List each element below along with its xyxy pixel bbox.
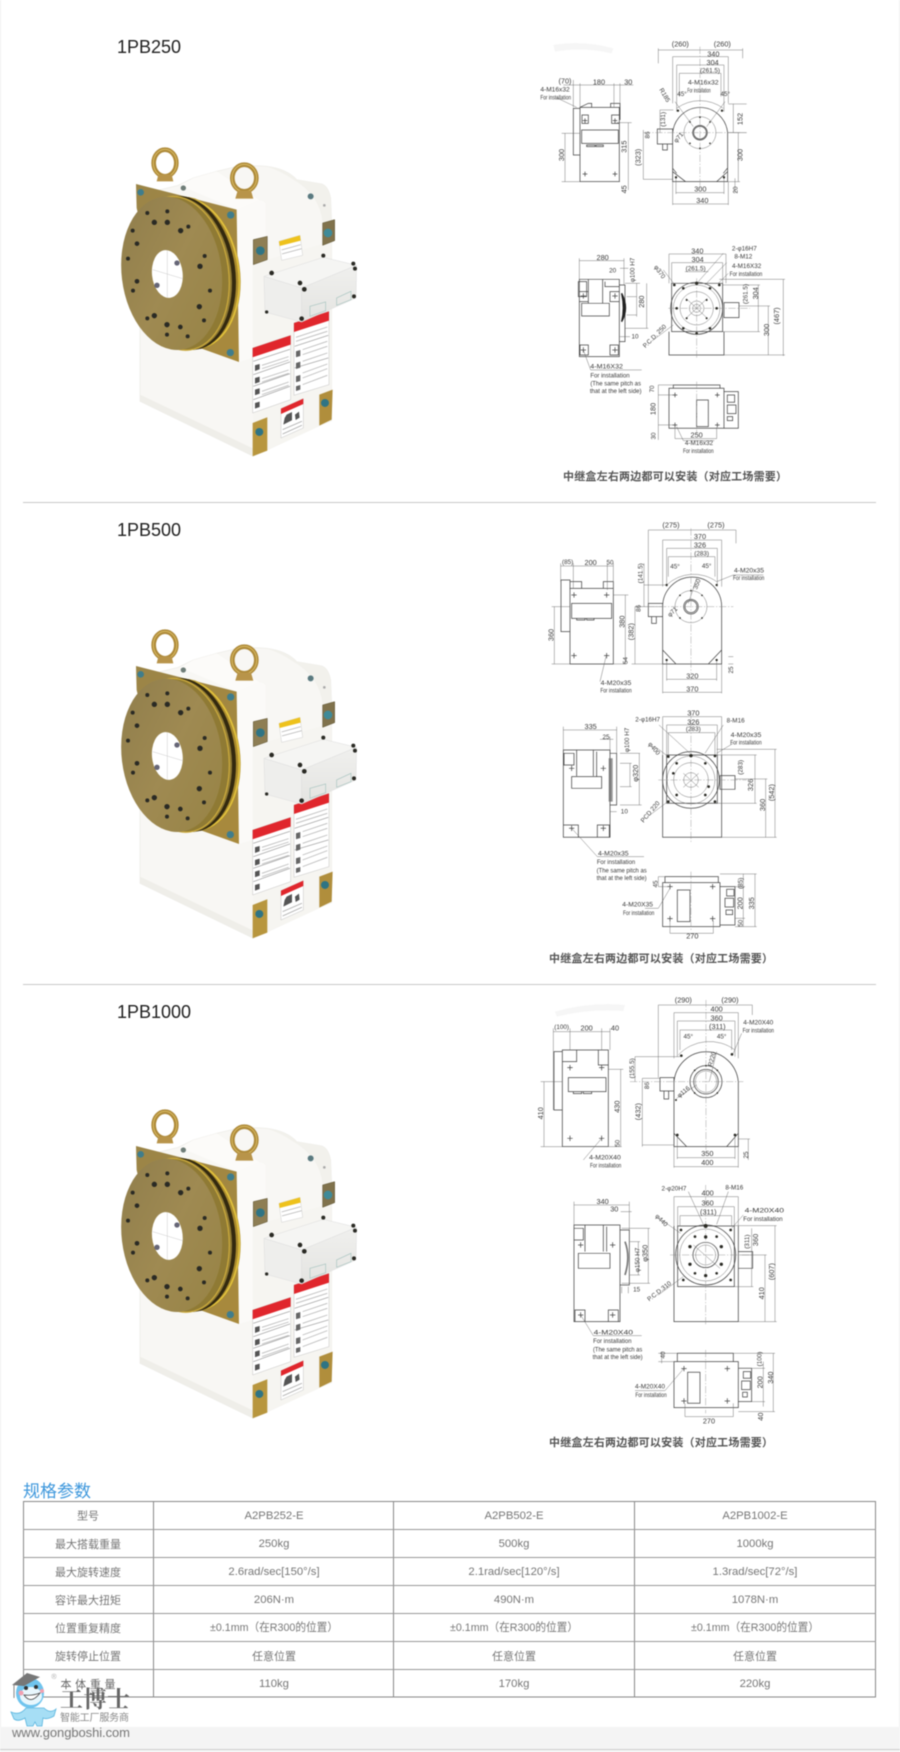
view: 1PB1000 side lower: that at the left side) bbox=[593, 1354, 643, 1361]
view: 1PB250 front lower: (261.5) bbox=[742, 284, 749, 304]
view: 1PB500 side upper: 54 bbox=[622, 657, 629, 664]
view: 1PB250 side upper: 30 bbox=[624, 78, 632, 87]
heading: 1PB250: 1PB250 bbox=[117, 37, 181, 57]
view: 1PB250 front upper: (131) bbox=[660, 112, 667, 127]
view: 1PB1000 front upper: 360 bbox=[711, 1013, 723, 1022]
view: 1PB1000 front lower: 400 bbox=[702, 1189, 714, 1198]
view: 1PB250 side lower: that at the left side) bbox=[590, 388, 641, 395]
view: 1PB500 front upper: (275) bbox=[662, 521, 680, 530]
row: stop position: 旋转停止位置 bbox=[55, 1649, 121, 1663]
product photo: 1PB500 positioner bbox=[113, 631, 357, 938]
view: 1PB1000 front lower: 360 bbox=[702, 1199, 714, 1208]
view: 1PB500 front upper: (382) bbox=[626, 623, 635, 640]
view: 1PB250 bottom: 70 bbox=[649, 385, 656, 392]
view: 1PB500 front upper: 25 bbox=[728, 666, 735, 674]
view: 1PB250 side lower: For installation bbox=[590, 372, 630, 379]
view: 1PB1000 side upper: 200 bbox=[581, 1024, 593, 1033]
view: 1PB250 front lower: 4-M16X32 bbox=[732, 263, 762, 270]
view: 1PB1000 side upper: 410 bbox=[536, 1107, 545, 1119]
view: 1PB500 front lower bbox=[635, 709, 777, 843]
view: 1PB250 bottom: For installation bbox=[683, 448, 714, 455]
view: 1PB250 front upper: 304 bbox=[707, 58, 719, 67]
view: 1PB1000 side upper: For installation bbox=[590, 1162, 622, 1169]
view: 1PB1000 side upper: 40 bbox=[611, 1024, 619, 1033]
row: max torque: 206N·m bbox=[254, 1594, 294, 1606]
row: max payload: 最大搭载重量 bbox=[55, 1537, 121, 1551]
caption: 1PB1000: 中继盒左右两边都可以安装（对应工场需要） bbox=[549, 1435, 773, 1449]
caption: 1PB500: 中继盒左右两边都可以安装（对应工场需要） bbox=[549, 951, 773, 965]
row: max torque: 490N·m bbox=[494, 1594, 534, 1606]
view: 1PB250 front upper: (323) bbox=[634, 149, 643, 166]
view: 1PB1000 front lower: 410 bbox=[757, 1287, 766, 1299]
view: 1PB250 front lower: 304 bbox=[751, 287, 760, 299]
view: 1PB500 front upper: 86 bbox=[636, 604, 643, 612]
view: 1PB500 side lower: 4-M20x35 bbox=[598, 851, 629, 858]
view: 1PB1000 front lower: (311) bbox=[700, 1208, 717, 1217]
product photo: 1PB1000 positioner bbox=[113, 1111, 357, 1418]
view: 1PB500 front upper: (283) bbox=[694, 550, 709, 557]
row: model: 型号 bbox=[77, 1508, 99, 1522]
view: 1PB500 front lower: For installation bbox=[730, 740, 762, 747]
view: 1PB1000 front upper: 25 bbox=[743, 1151, 750, 1159]
row: repeatability: ±0.1mm（在R300的位置） bbox=[210, 1620, 338, 1634]
view: 1PB500 front lower: (283) bbox=[686, 726, 701, 733]
row: max torque: 容许最大扭矩 bbox=[55, 1593, 121, 1607]
view: 1PB1000 front upper bbox=[629, 996, 774, 1168]
view: 1PB1000 front upper: 400 bbox=[701, 1158, 713, 1167]
view: 1PB250 bottom: 250 bbox=[691, 430, 703, 439]
row: body weight: 170kg bbox=[499, 1678, 529, 1690]
view: 1PB500 side lower: φ100 H7 bbox=[624, 727, 631, 752]
view: 1PB250 bottom: 30 bbox=[651, 432, 658, 439]
view: 1PB1000 front lower: (311) bbox=[744, 1234, 751, 1249]
view: 1PB1000 front upper: 45° bbox=[684, 1033, 694, 1041]
view: 1PB250 front lower: 340 bbox=[691, 246, 703, 255]
view: 1PB1000 side lower: φ150 H7 bbox=[635, 1247, 642, 1272]
caption: 1PB250: 中继盒左右两边都可以安装（对应工场需要） bbox=[563, 469, 787, 483]
view: 1PB250 front upper: 300 bbox=[694, 185, 706, 194]
view: 1PB500 front lower: 8-M16 bbox=[727, 718, 745, 725]
view: 1PB500 front upper: 45° bbox=[670, 563, 680, 571]
drawing: 1PB1000 dimensions bbox=[536, 996, 785, 1425]
row: model: A2PB1002-E bbox=[722, 1510, 788, 1522]
view: 1PB250 front upper: 20 bbox=[732, 186, 739, 194]
table: specifications bbox=[23, 1501, 876, 1697]
view: 1PB250 front upper: 86 bbox=[645, 131, 652, 139]
view: 1PB1000 side lower: φ350 bbox=[640, 1245, 649, 1262]
view: 1PB500 front lower: 326 bbox=[746, 779, 755, 791]
view: 1PB250 side upper bbox=[540, 76, 633, 193]
row: body weight: 110kg bbox=[259, 1678, 289, 1690]
view: 1PB500 front lower: PCD 220 bbox=[640, 800, 662, 824]
view: 1PB1000 front upper: 4-M20X40 bbox=[743, 1020, 774, 1027]
icon: mascot bbox=[11, 1673, 56, 1726]
view: 1PB500 front upper: 350 bbox=[692, 578, 703, 590]
view: 1PB500 side lower: 10 bbox=[621, 808, 628, 815]
view: 1PB250 side upper: 4-M16x32 bbox=[540, 86, 570, 93]
row: stop position bbox=[55, 1649, 777, 1663]
view: 1PB1000 front lower: 4-M20X40 bbox=[745, 1208, 785, 1215]
logo tagline: 智能工厂服务商 bbox=[60, 1711, 129, 1724]
view: 1PB1000 side upper bbox=[536, 1024, 623, 1169]
watermark logo bbox=[11, 1673, 130, 1740]
view: 1PB250 front lower: 304 bbox=[692, 255, 704, 264]
drawing: 1PB250 dimensions bbox=[540, 39, 785, 455]
view: 1PB1000 side lower bbox=[574, 1197, 650, 1361]
view: 1PB500 front lower: (283) bbox=[737, 760, 744, 775]
view: 1PB250 front lower bbox=[642, 245, 785, 358]
row: max payload: 1000kg bbox=[736, 1538, 774, 1550]
view: 1PB1000 front lower bbox=[646, 1185, 785, 1325]
view: 1PB500 front upper bbox=[626, 521, 765, 693]
view: 1PB250 side upper: 300 bbox=[557, 149, 566, 161]
view: 1PB1000 front upper: (290) bbox=[675, 996, 692, 1005]
view: 1PB250 front lower: For installation bbox=[730, 271, 763, 278]
view: 1PB1000 front upper: (155.5) bbox=[629, 1058, 636, 1078]
row: repeatability: ±0.1mm（在R300的位置） bbox=[691, 1620, 819, 1634]
view: 1PB500 front lower: 4-M20x35 bbox=[731, 732, 762, 739]
view: 1PB500 front upper: 370 bbox=[694, 532, 706, 541]
view: 1PB500 side lower: 25 bbox=[602, 734, 610, 741]
view: 1PB500 side lower: 335 bbox=[585, 722, 597, 731]
view: 1PB250 side lower: 4-M16X32 bbox=[590, 364, 624, 371]
view: 1PB1000 front upper: (311) bbox=[709, 1022, 726, 1031]
view: 1PB250 side upper: (70) bbox=[558, 76, 572, 85]
view: 1PB250 front upper bbox=[634, 39, 747, 205]
view: 1PB1000 front upper: 400 bbox=[711, 1005, 723, 1014]
view: 1PB500 bottom: For installation bbox=[623, 910, 655, 917]
view: 1PB1000 front upper: 86 bbox=[644, 1082, 651, 1089]
view: 1PB250 front upper: (261.5) bbox=[700, 67, 720, 74]
view: 1PB250 front upper: 152 bbox=[735, 113, 744, 125]
view: 1PB500 side lower: (The same pitch as bbox=[597, 867, 647, 874]
drawing: 1PB500 dimensions bbox=[546, 521, 777, 941]
view: 1PB500 side upper: 200 bbox=[585, 558, 597, 567]
row: repeatability: 位置重复精度 bbox=[55, 1621, 121, 1635]
view: 1PB500 bottom: 4-M20X35 bbox=[622, 902, 653, 909]
view: 1PB1000 front upper: φ116 bbox=[676, 1085, 692, 1100]
view: 1PB250 front lower: 8-M12 bbox=[734, 254, 753, 261]
row: stop position: 任意位置 bbox=[252, 1649, 296, 1663]
view: 1PB1000 bottom: 40 bbox=[756, 1413, 765, 1421]
divider bbox=[23, 502, 876, 503]
view: 1PB250 side lower: 20 bbox=[609, 267, 617, 274]
view: 1PB250 side upper: For installation bbox=[540, 94, 571, 101]
heading: specifications: 规格参数 bbox=[23, 1482, 91, 1501]
view: 1PB1000 side upper: 430 bbox=[613, 1101, 622, 1113]
view: 1PB500 bottom: 45 bbox=[652, 880, 659, 887]
view: 1PB500 bottom: 270 bbox=[686, 932, 698, 941]
view: 1PB500 front upper: 326 bbox=[694, 540, 706, 549]
view: 1PB250 front lower: P.C.D. 250 bbox=[642, 323, 668, 350]
view: 1PB250 front upper: For installation bbox=[687, 88, 711, 95]
logo url: www.gongboshi.com bbox=[11, 1725, 130, 1740]
view: 1PB1000 front upper: 350 bbox=[701, 1149, 713, 1158]
view: 1PB500 bottom: 50 bbox=[737, 919, 744, 927]
row: model: A2PB502-E bbox=[484, 1510, 544, 1522]
view: 1PB1000 bottom: 340 bbox=[766, 1372, 775, 1384]
view: 1PB500 front lower: 2-φ16H7 bbox=[635, 716, 661, 723]
view: 1PB500 bottom: 200 bbox=[735, 897, 744, 909]
view: 1PB250 side upper: 45 bbox=[620, 185, 629, 193]
row: stop position: 任意位置 bbox=[492, 1649, 536, 1663]
row: body weight: 本体重量 bbox=[60, 1677, 116, 1691]
view: 1PB250 front lower: (261.5) bbox=[686, 266, 706, 273]
view: 1PB250 side lower: 280 bbox=[637, 296, 646, 308]
logo text: 工博士 bbox=[60, 1687, 130, 1712]
view: 1PB500 front lower: 370 bbox=[687, 709, 699, 718]
view: 1PB500 front upper: For installation bbox=[733, 575, 765, 582]
view: 1PB500 front lower: 360 bbox=[758, 799, 767, 811]
view: 1PB250 side lower: 280 bbox=[597, 253, 609, 262]
view: 1PB250 front lower: 2-φ16H7 bbox=[732, 245, 757, 252]
view: 1PB1000 front upper: R220 bbox=[707, 1051, 718, 1067]
row: body weight bbox=[60, 1677, 770, 1691]
view: 1PB500 side upper bbox=[546, 558, 632, 694]
view: 1PB250 front upper: 4-M16x32 bbox=[688, 80, 719, 87]
icon: registered mark: ® bbox=[51, 1673, 57, 1681]
view: 1PB500 side upper: 360 bbox=[546, 629, 555, 641]
view: 1PB250 side lower: (The same pitch as bbox=[590, 380, 641, 387]
view: 1PB500 front upper: φ71 bbox=[666, 605, 680, 619]
row: model: A2PB252-E bbox=[244, 1510, 304, 1522]
product photo: 1PB250 positioner bbox=[113, 149, 357, 456]
view: 1PB500 bottom bbox=[622, 872, 757, 941]
view: 1PB1000 front lower: φ440 bbox=[653, 1213, 669, 1229]
view: 1PB1000 front lower: (607) bbox=[767, 1263, 776, 1280]
view: 1PB250 front lower: (467) bbox=[772, 307, 781, 325]
view: 1PB250 side lower: 10 bbox=[631, 333, 639, 340]
row: stop position: 任意位置 bbox=[733, 1649, 777, 1663]
view: 1PB250 bottom: 180 bbox=[649, 403, 658, 415]
view: 1PB250 front upper: (260) bbox=[672, 39, 689, 48]
view: 1PB250 front upper: 340 bbox=[696, 196, 708, 205]
view: 1PB1000 side upper: 50 bbox=[615, 1139, 622, 1147]
view: 1PB1000 front lower: 360 bbox=[751, 1234, 760, 1246]
row: max rotation speed: 1.3rad/sec[72°/s] bbox=[713, 1566, 797, 1578]
view: 1PB1000 front lower: 2-φ20H7 bbox=[662, 1185, 687, 1192]
view: 1PB1000 side lower: 15 bbox=[633, 1287, 641, 1294]
view: 1PB500 side upper: For installation bbox=[600, 687, 632, 694]
view: 1PB250 front upper: φ71 bbox=[673, 131, 686, 144]
view: 1PB500 front upper: (141.5) bbox=[637, 563, 644, 583]
view: 1PB1000 front upper: (432) bbox=[634, 1103, 643, 1120]
view: 1PB1000 front lower: P.C.D.310 bbox=[646, 1280, 673, 1303]
view: 1PB500 front lower: φ400 bbox=[646, 741, 661, 757]
view: 1PB1000 bottom: For installation bbox=[635, 1392, 667, 1399]
view: 1PB250 front upper: R185 bbox=[657, 87, 671, 104]
row: model bbox=[77, 1508, 788, 1522]
view: 1PB1000 side upper: (100) bbox=[554, 1024, 569, 1031]
divider bbox=[23, 984, 876, 985]
view: 1PB500 front upper: 45° bbox=[702, 562, 712, 570]
view: 1PB250 front lower: 300 bbox=[762, 324, 771, 336]
row: max rotation speed bbox=[55, 1565, 797, 1579]
heading: 1PB1000: 1PB1000 bbox=[117, 1002, 191, 1022]
view: 1PB1000 bottom: 270 bbox=[703, 1416, 715, 1425]
view: 1PB250 front upper: 340 bbox=[707, 50, 719, 59]
view: 1PB1000 bottom: 4-M20X40 bbox=[635, 1384, 665, 1391]
view: 1PB250 bottom bbox=[649, 382, 738, 455]
row: repeatability: ±0.1mm（在R300的位置） bbox=[450, 1620, 578, 1634]
view: 1PB250 bottom: 4-M16x32 bbox=[685, 440, 714, 447]
view: 1PB500 front upper: 320 bbox=[686, 671, 698, 680]
view: 1PB1000 side upper: 4-M20X40 bbox=[589, 1154, 621, 1161]
row: max rotation speed: 最大旋转速度 bbox=[55, 1565, 121, 1579]
view: 1PB500 front upper: 370 bbox=[686, 684, 698, 693]
view: 1PB250 front lower: φ370 bbox=[652, 264, 667, 281]
view: 1PB250 side lower: φ100 H7 bbox=[630, 257, 637, 282]
view: 1PB1000 front lower: For installation bbox=[743, 1216, 783, 1223]
row: body weight: 220kg bbox=[740, 1678, 770, 1690]
view: 1PB500 front lower: 326 bbox=[687, 717, 699, 726]
view: 1PB500 side lower: For installation bbox=[597, 859, 636, 866]
view: 1PB1000 front upper: For installation bbox=[743, 1028, 774, 1035]
view: 1PB1000 side lower: 30 bbox=[610, 1204, 618, 1213]
view: 1PB1000 bottom: (100) bbox=[756, 1352, 763, 1366]
view: 1PB500 front upper: (275) bbox=[707, 521, 725, 530]
heading: 1PB500: 1PB500 bbox=[117, 520, 181, 540]
view: 1PB250 side upper: 180 bbox=[593, 78, 605, 87]
view: 1PB1000 side lower: (The same pitch as bbox=[593, 1346, 642, 1353]
view: 1PB1000 front upper: (290) bbox=[721, 996, 739, 1005]
view: 1PB500 side upper: 50 bbox=[606, 560, 614, 567]
view: 1PB500 bottom: 335 bbox=[747, 897, 756, 909]
view: 1PB500 side lower: φ320 bbox=[631, 765, 640, 782]
view: 1PB1000 side lower: 4-M20X40 bbox=[594, 1329, 634, 1336]
view: 1PB1000 bottom bbox=[635, 1350, 775, 1425]
view: 1PB250 front upper: (260) bbox=[714, 39, 731, 48]
view: 1PB500 side upper: 4-M20x35 bbox=[601, 680, 632, 687]
view: 1PB250 side lower bbox=[578, 253, 648, 395]
view: 1PB1000 side lower: For installation bbox=[593, 1338, 632, 1345]
row: repeatability bbox=[55, 1620, 819, 1635]
view: 1PB1000 bottom: 40 bbox=[660, 1351, 667, 1358]
view: 1PB1000 front upper: 45° bbox=[717, 1033, 727, 1041]
view: 1PB1000 bottom: 200 bbox=[755, 1376, 764, 1388]
view: 1PB1000 front lower: 8-M16 bbox=[725, 1185, 744, 1192]
view: 1PB500 side upper: (85) bbox=[562, 559, 573, 566]
row: max rotation speed: 2.1rad/sec[120°/s] bbox=[468, 1566, 560, 1578]
view: 1PB500 side lower: that at the left side) bbox=[597, 875, 647, 882]
row: max rotation speed: 2.6rad/sec[150°/s] bbox=[228, 1566, 320, 1578]
view: 1PB250 front upper: 45° bbox=[677, 90, 687, 98]
view: 1PB500 front lower: (542) bbox=[767, 784, 776, 801]
view: 1PB250 front upper: 300 bbox=[735, 149, 744, 161]
row: max torque bbox=[55, 1593, 778, 1607]
row: max payload: 500kg bbox=[499, 1538, 529, 1550]
row: max torque: 1078N·m bbox=[732, 1594, 778, 1606]
view: 1PB500 bottom: (85) bbox=[737, 878, 744, 889]
view: 1PB250 front upper: 45° bbox=[721, 90, 731, 98]
view: 1PB250 side upper: 315 bbox=[620, 141, 629, 153]
row: max payload: 250kg bbox=[259, 1538, 289, 1550]
row: max payload bbox=[55, 1537, 774, 1551]
view: 1PB500 front upper: 4-M20x35 bbox=[734, 568, 764, 575]
view: 1PB1000 side lower: 340 bbox=[597, 1197, 609, 1206]
view: 1PB500 side lower bbox=[563, 722, 647, 882]
view: 1PB500 side upper: 380 bbox=[617, 616, 626, 628]
